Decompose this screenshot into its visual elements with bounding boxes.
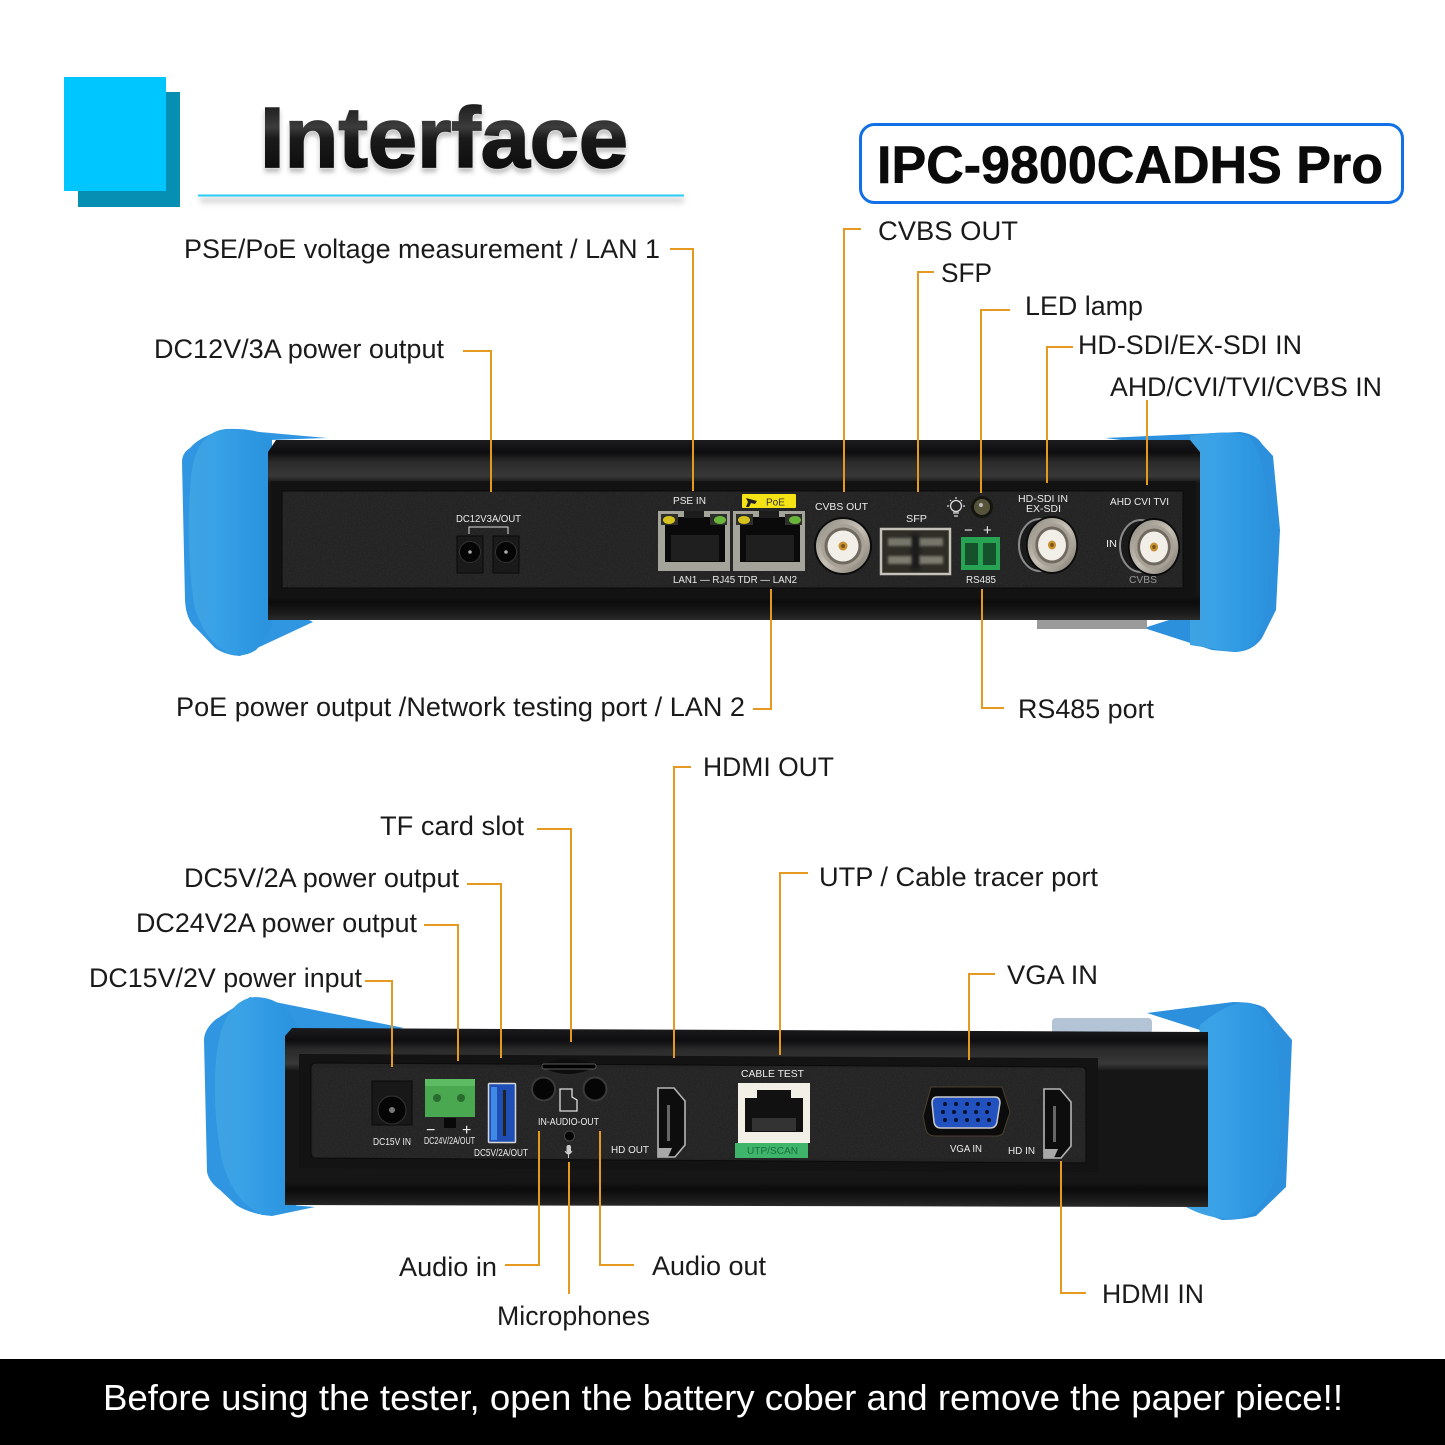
right blue bumper bbox=[1147, 1002, 1292, 1220]
AHD CVI TVI connector bbox=[1106, 497, 1180, 586]
LED lamp and icon bbox=[947, 496, 993, 518]
callout: RS485 port bbox=[982, 589, 1155, 724]
metal body bbox=[268, 440, 1200, 620]
USB port bbox=[474, 1084, 528, 1159]
icon: cyan stacked squares bbox=[64, 77, 180, 207]
grey base under body bbox=[1037, 618, 1147, 629]
callout: HDMI OUT: HDMI OUT bbox=[703, 752, 834, 782]
callout: TF card slot bbox=[380, 811, 571, 1042]
callout: UTP / Cable tracer port: UTP / Cable tracer port bbox=[819, 862, 1099, 892]
callout: Microphones: Microphones bbox=[497, 1301, 650, 1331]
callout: PoE power output LAN 2 bbox=[176, 589, 771, 722]
DC24V terminal: DC24V/2A/OUT bbox=[424, 1136, 475, 1147]
callout: TF card slot: TF card slot bbox=[380, 811, 525, 841]
VGA port bbox=[923, 1087, 1010, 1155]
HDMI out: HD OUT bbox=[611, 1145, 649, 1156]
DC12V outputs bbox=[456, 514, 521, 573]
HD-SDI connector: EX-SDI bbox=[1026, 504, 1061, 515]
bottom device bbox=[204, 997, 1292, 1220]
callout: Audio out bbox=[600, 1131, 767, 1281]
AHD CVI TVI connector: IN bbox=[1106, 539, 1117, 550]
LAN ports bbox=[658, 496, 805, 586]
PoE tag bbox=[742, 494, 796, 508]
DC15V input bbox=[372, 1081, 412, 1148]
model name badge: IPC-9800CADHS Pro bbox=[877, 136, 1383, 195]
callout: VGA IN bbox=[969, 960, 1098, 1060]
callout: HD-SDI/EX-SDI IN bbox=[1047, 330, 1302, 483]
callout: PoE power output LAN 2: PoE power output /Network testing port / LAN 2 bbox=[176, 692, 745, 722]
DC12V outputs: DC12V3A/OUT bbox=[456, 514, 521, 525]
callout: HDMI IN: HDMI IN bbox=[1102, 1279, 1204, 1309]
audio jacks bbox=[532, 1078, 606, 1100]
callout: DC5V/2A power output: DC5V/2A power output bbox=[184, 863, 460, 893]
callout: AHD/CVI/TVI/CVBS IN: AHD/CVI/TVI/CVBS IN bbox=[1110, 372, 1382, 402]
callout: LED lamp: LED lamp bbox=[1025, 291, 1143, 321]
callout: Audio in bbox=[399, 1131, 539, 1282]
RS485 terminal: − bbox=[964, 522, 973, 539]
callout: Audio out: Audio out bbox=[652, 1251, 767, 1281]
callout: RS485 port: RS485 port bbox=[1018, 694, 1155, 724]
callout: DC15V/2V power input bbox=[89, 963, 392, 1067]
SFP port: SFP bbox=[906, 514, 927, 525]
PoE tag: PoE bbox=[766, 498, 785, 508]
callout: Audio in: Audio in bbox=[399, 1252, 497, 1282]
DC24V terminal: + bbox=[462, 1122, 471, 1139]
callout: DC5V/2A power output bbox=[184, 863, 501, 1058]
VGA port: VGA IN bbox=[950, 1144, 982, 1155]
HDMI out bbox=[611, 1088, 685, 1157]
CVBS OUT connector bbox=[814, 502, 872, 575]
callout: DC15V/2V power input: DC15V/2V power input bbox=[89, 963, 363, 993]
SFP port bbox=[881, 514, 950, 574]
HD-SDI connector bbox=[1018, 494, 1078, 574]
left blue bumper bbox=[182, 429, 327, 656]
footer notice bar: Before using the tester, open the battery cober and remove the paper piece!! bbox=[103, 1377, 1343, 1418]
footer notice bar bbox=[0, 1359, 1445, 1445]
callout: HD-SDI/EX-SDI IN: HD-SDI/EX-SDI IN bbox=[1078, 330, 1302, 360]
DC24V terminal bbox=[424, 1079, 475, 1147]
callout: PSE/PoE LAN 1: PSE/PoE voltage measurement / LAN 1 bbox=[184, 234, 660, 264]
grey top piece bbox=[1052, 1018, 1152, 1034]
HDMI in bbox=[1008, 1089, 1071, 1158]
CVBS OUT connector: CVBS OUT bbox=[815, 502, 868, 513]
callout: DC24V2A power output: DC24V2A power output bbox=[136, 908, 418, 938]
callout: DC24V2A power output bbox=[136, 908, 458, 1061]
callout: VGA IN: VGA IN bbox=[1007, 960, 1098, 990]
USB port: DC5V/2A/OUT bbox=[474, 1148, 528, 1159]
callout: SFP: SFP bbox=[941, 258, 992, 288]
microphone hole and icon bbox=[564, 1131, 574, 1158]
LAN ports: LAN1 — RJ45 TDR — LAN2 bbox=[673, 575, 797, 586]
audio label: IN-AUDIO-OUT bbox=[538, 1117, 599, 1128]
callout: UTP / Cable tracer port bbox=[780, 862, 1099, 1055]
metal body bbox=[285, 1028, 1208, 1207]
port panel bbox=[299, 1054, 1098, 1172]
top device bbox=[182, 429, 1280, 656]
HDMI in: HD IN bbox=[1008, 1146, 1035, 1157]
left blue bumper bbox=[204, 997, 404, 1216]
port panel bbox=[271, 481, 1196, 597]
icon: SD card bbox=[560, 1089, 577, 1111]
callout: LED lamp bbox=[981, 291, 1143, 493]
callout: PSE/PoE LAN 1 bbox=[184, 234, 693, 491]
cable test port: UTP/SCAN bbox=[747, 1146, 798, 1157]
callout: HDMI IN bbox=[1061, 1161, 1204, 1309]
callout: CVBS OUT: CVBS OUT bbox=[878, 216, 1018, 246]
callout: DC12V power output: DC12V/3A power output bbox=[154, 334, 445, 364]
LAN ports: PSE IN bbox=[673, 496, 706, 507]
RS485 terminal: + bbox=[983, 522, 992, 539]
AHD CVI TVI connector: AHD CVI TVI bbox=[1110, 497, 1169, 508]
callout: SFP bbox=[918, 258, 992, 492]
right blue bumper bbox=[1105, 432, 1280, 652]
RS485 terminal bbox=[961, 522, 1000, 586]
TF card slot bbox=[540, 1059, 597, 1074]
callout: DC12V power output bbox=[154, 334, 491, 492]
HD-SDI connector: HD-SDI IN bbox=[1018, 494, 1068, 505]
title: Interface bbox=[260, 91, 628, 186]
title underline bbox=[198, 194, 684, 203]
DC15V input: DC15V IN bbox=[373, 1137, 411, 1148]
cable test port: CABLE TEST bbox=[741, 1069, 804, 1080]
cable test port bbox=[735, 1069, 810, 1158]
callout: CVBS OUT bbox=[844, 216, 1018, 492]
AHD CVI TVI connector: CVBS bbox=[1129, 575, 1157, 586]
callout: HDMI OUT bbox=[674, 752, 834, 1058]
RS485 terminal: RS485 bbox=[966, 575, 996, 586]
DC24V terminal: − bbox=[426, 1122, 435, 1139]
